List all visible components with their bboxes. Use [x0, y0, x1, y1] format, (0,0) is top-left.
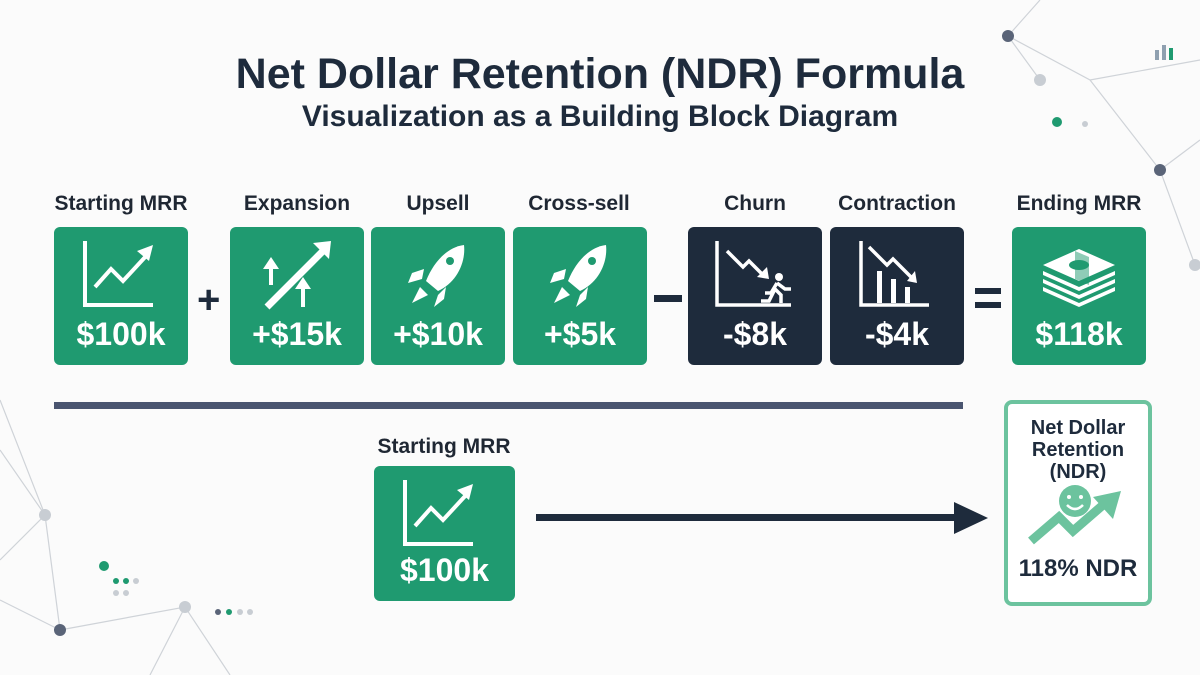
block: Starting MRR bottom [374, 466, 515, 601]
NDR heading: (NDR) [1050, 461, 1106, 483]
block: Contraction [830, 227, 964, 365]
label: Upsell: Upsell [406, 192, 470, 215]
block: Cross-sell [513, 227, 647, 365]
NDR heading: Retention [1032, 439, 1124, 461]
block: Upsell: +$10k [393, 316, 483, 352]
subtitle: Visualization as a Building Block Diagram [302, 100, 898, 133]
NDR heading: Net Dollar [1031, 417, 1125, 439]
label: Starting MRR: Starting MRR [54, 192, 188, 215]
block: Cross-sell: +$5k [544, 316, 616, 352]
block: Churn [688, 227, 822, 365]
icon: smiley rising arrow [1028, 485, 1121, 544]
operator minus [654, 295, 682, 302]
block: Expansion: +$15k [252, 316, 342, 352]
label: Churn: Churn [724, 192, 786, 215]
label: Contraction: Contraction [838, 192, 956, 215]
divider bar [54, 402, 963, 409]
arrow [536, 502, 988, 534]
NDR result card [1004, 400, 1152, 606]
label: Cross-sell: Cross-sell [528, 192, 630, 215]
block: Starting MRR bottom: $100k [400, 552, 489, 588]
label: Ending MRR: Ending MRR [1017, 192, 1141, 215]
block: Expansion [230, 227, 364, 365]
label: Starting MRR (bottom): Starting MRR [378, 435, 510, 458]
block: Starting MRR [54, 227, 188, 365]
block: Upsell [371, 227, 505, 365]
NDR value: 118% NDR [1019, 555, 1137, 582]
operator plus: + [197, 278, 220, 322]
block: Ending MRR: $118k [1035, 316, 1123, 352]
block: Starting MRR: $100k [76, 316, 165, 352]
block: Ending MRR [1012, 227, 1146, 365]
NDR heading [1031, 417, 1125, 483]
block: Churn: -$8k [723, 316, 787, 352]
block: Contraction: -$4k [865, 316, 929, 352]
label: Expansion: Expansion [244, 192, 350, 215]
title: Net Dollar Retention (NDR) Formula [236, 50, 964, 98]
operator equals [975, 288, 1001, 308]
